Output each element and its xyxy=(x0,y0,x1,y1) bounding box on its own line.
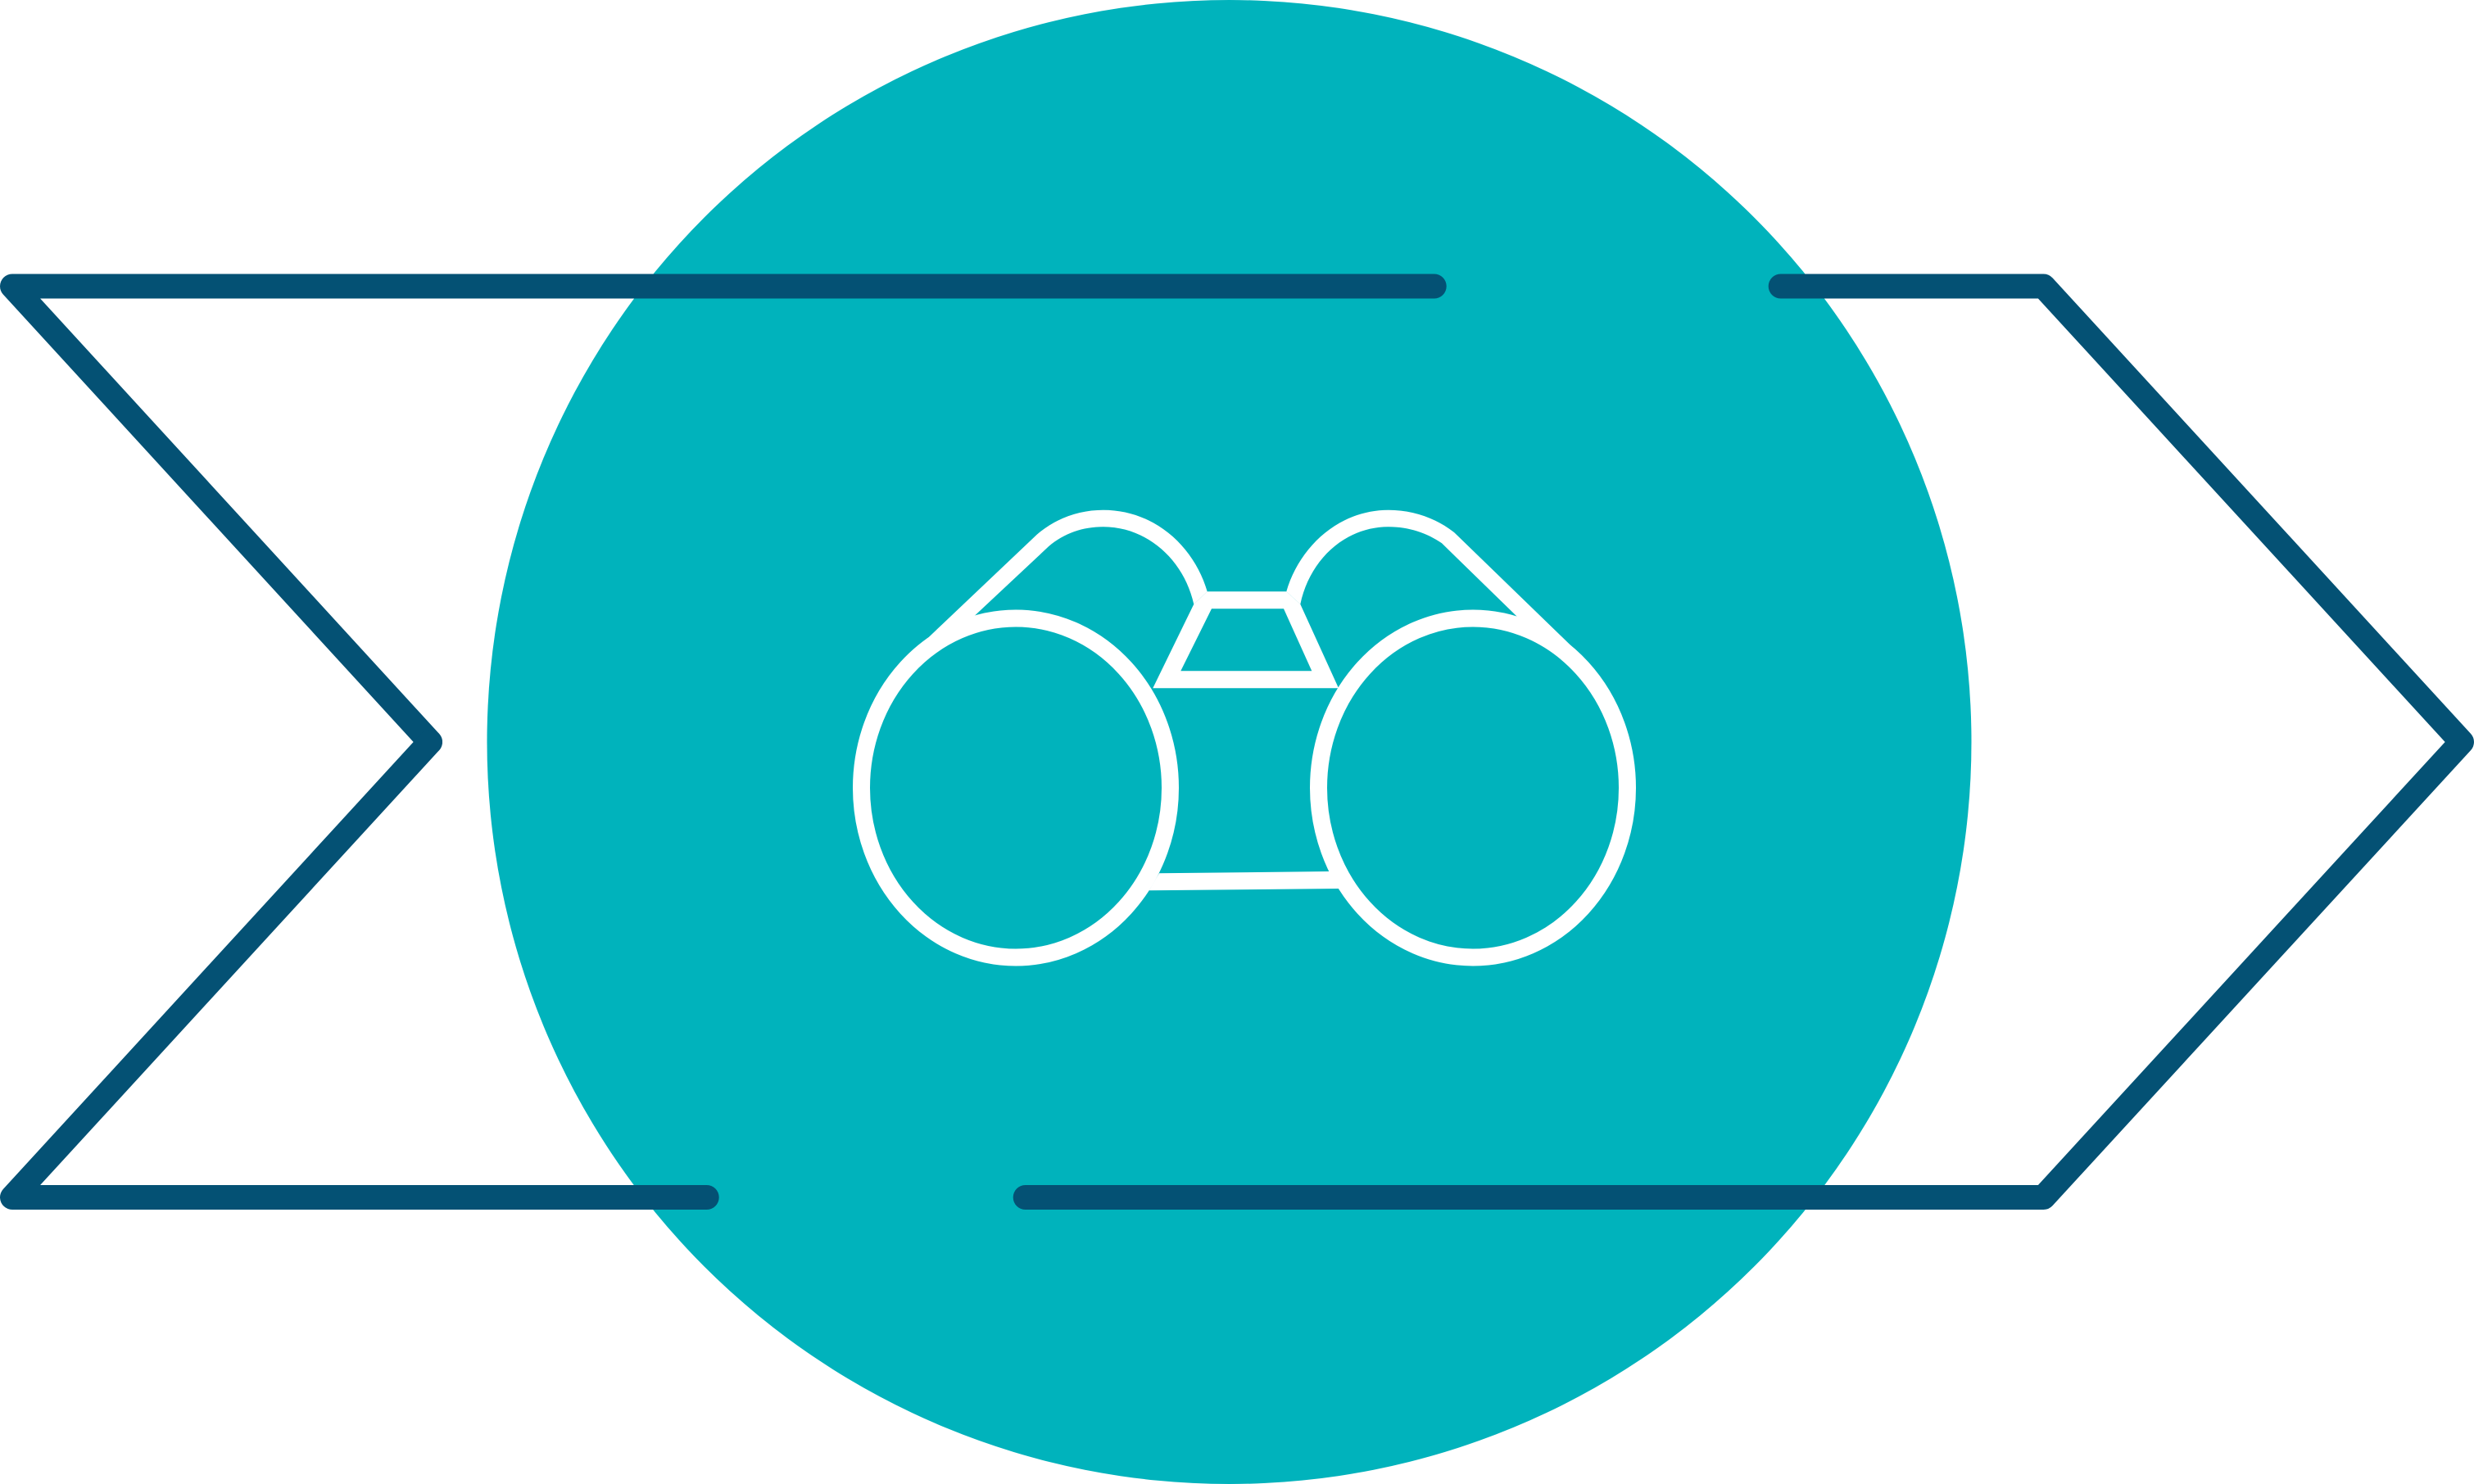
icon: binoculars xyxy=(862,510,1627,957)
ribbon outline: right part xyxy=(1026,287,2462,1197)
binoculars left arm xyxy=(901,510,1208,667)
binoculars left lens xyxy=(862,618,1170,957)
binoculars hinge trapezoid xyxy=(1153,591,1339,688)
ribbon left lower stroke and bottom bar xyxy=(12,742,707,1197)
teal circle background xyxy=(487,0,1971,1484)
ribbon outline: left part xyxy=(12,287,1434,1197)
binoculars right arm xyxy=(1286,510,1589,667)
ribbon left upper stroke and top bar xyxy=(12,287,1434,742)
binoculars lower bridge xyxy=(1149,871,1339,890)
binoculars right lens xyxy=(1319,618,1627,957)
ribbon right arrow outline xyxy=(1026,287,2462,1197)
